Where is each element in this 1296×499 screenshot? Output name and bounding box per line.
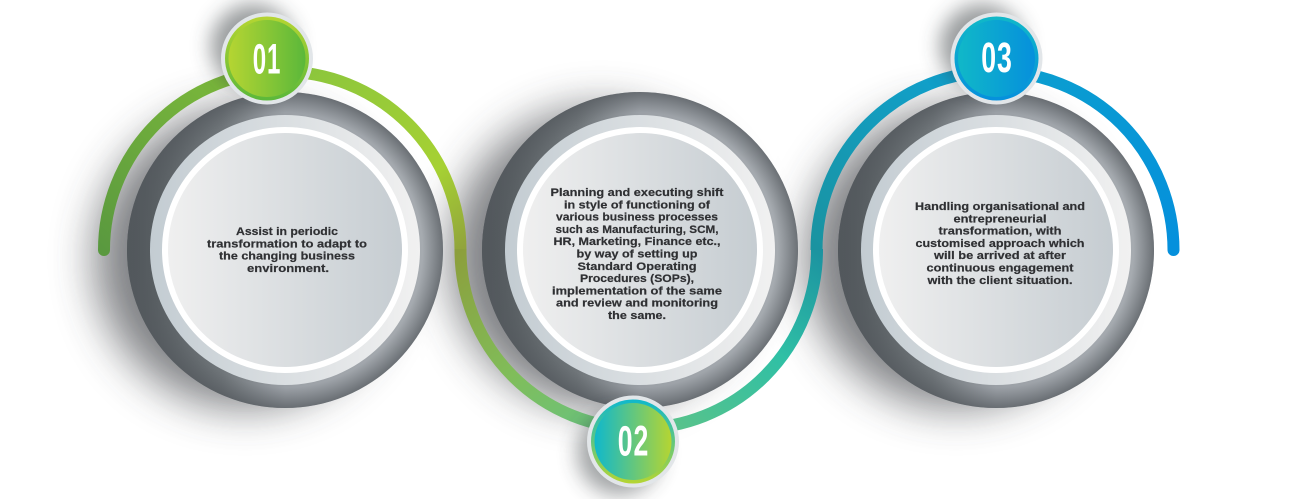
text: circle 1 description: environment. — [247, 263, 329, 275]
badge: 01: 01 — [253, 35, 281, 83]
badge: 03 — [940, 4, 1042, 104]
text: circle 1 description: Assist in periodic — [236, 226, 338, 238]
arc: green top arc around circle 1 — [104, 72, 461, 250]
text: circle 2 description: various business processes — [556, 212, 718, 224]
arc: teal-to-blue top arc around circle 3 — [816, 72, 1174, 250]
text: circle 1 description: the changing business — [219, 251, 355, 263]
text: circle 3 description: continuous engagement — [926, 262, 1074, 274]
badge: 03: 03 — [981, 34, 1013, 82]
panel: circle 1 — [127, 92, 443, 408]
arc: green-to-teal bottom arc around circle 2 — [460, 249, 817, 428]
text: circle 2 description: by way of setting up — [576, 248, 698, 260]
panel: circle 3 — [838, 92, 1154, 408]
badge: 02 — [577, 396, 679, 495]
panel: circle 2 — [482, 92, 798, 408]
text: circle 2 description: such as Manufacturing, SCM, — [556, 224, 718, 236]
text: circle 2 description: the same. — [608, 310, 666, 322]
text: circle 2 description: Standard Operating — [578, 261, 697, 273]
text: circle 2 description: HR, Marketing, Finance etc., — [554, 236, 720, 248]
text: circle 3 description: will be arrived at after — [933, 250, 1067, 262]
badge: 01 — [211, 4, 313, 104]
text: circle 3 description — [915, 201, 1085, 287]
text: circle 3 description: Handling organisational and — [915, 201, 1085, 213]
text: circle 3 description: customised approach which — [916, 238, 1085, 250]
text: circle 2 description — [550, 187, 724, 322]
text: circle 3 description: with the client situation. — [926, 275, 1072, 287]
text: circle 2 description: and review and monitoring — [556, 298, 718, 310]
text: circle 2 description: in style of functioning of — [564, 199, 710, 211]
badge: 02: 02 — [618, 417, 649, 465]
text: circle 2 description: implementation of the same — [552, 285, 722, 297]
text: circle 3 description: transformation, with — [938, 226, 1062, 238]
text: circle 2 description: Planning and executing shift — [550, 187, 724, 199]
text: circle 3 description: entrepreneurial — [954, 213, 1046, 225]
text: circle 2 description: Procedures (SOPs), — [580, 273, 694, 285]
circle drop shadows — [95, 108, 1106, 408]
text: circle 1 description — [207, 226, 367, 275]
text: circle 1 description: transformation to adapt to — [207, 238, 367, 250]
